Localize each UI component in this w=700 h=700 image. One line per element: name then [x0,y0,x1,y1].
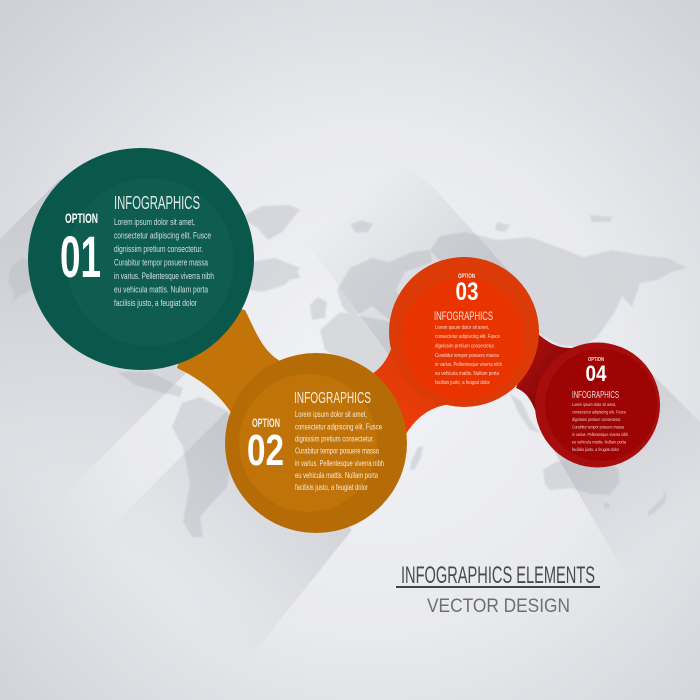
option 04 body text: facilisis justo, a feugiat dolor [572,447,619,452]
option 04 number: 04 [586,361,607,386]
option 03 body text: Curabitur tempor posuere massa [435,353,500,359]
option 02 body text: dignissim pretium consectetur. [295,434,374,444]
option 01 body text [114,217,214,308]
option 03 body text [435,325,502,386]
panel: option 01 [28,148,254,370]
connector: 03 to 04 [516,334,572,412]
connector: 02 to 03 [372,335,452,434]
option 03 body text: Lorem ipsum dolor sit amet, [435,325,489,331]
option 02 body text: consectetur adipiscing elit. Fusce [295,422,382,432]
option 04 body text: Curabitur tempor posuere massa [572,424,624,430]
panel: option 02 [225,353,407,533]
long shadows [0,165,700,700]
option 04 body text: eu vehicula mattis. Nullam porta [572,440,626,444]
connector: 01 to 02 [177,300,300,440]
option 01 body text: in varius. Pellentesque viverra nibh [114,271,214,281]
subtitle: vector design: VECTOR DESIGN [427,595,570,617]
option 02 number: 02 [247,426,284,475]
option 02 body text: eu vehicula mattis. Nullam porta [295,471,378,480]
panel: option 03 [389,257,539,407]
option 04 heading: INFOGRAPHICS [572,390,619,401]
option 02 body text: Curabitur tempor posuere massa [295,446,379,456]
option 03 body text: dignissim pretium consectetur. [435,344,495,350]
option 03 body text: in varius. Pellentesque viverra nibh [435,362,502,368]
option 04 body text: in varius. Pellentesque viverra nibh [572,432,628,437]
option 02 body text: facilisis justo, a feugiat dolor [295,483,368,492]
option 04 label: OPTION [588,357,604,363]
option 03 number: 03 [456,278,478,306]
option 03 label: OPTION [458,273,475,280]
option 01 body text: eu vehicula mattis. Nullam porta [114,284,208,294]
option 01 label: OPTION [65,210,98,226]
option 01 body text: Curabitur tempor posuere massa [114,258,208,268]
option 03 body text: facilisis justo, a feugiat dolor [435,380,490,386]
option 03 heading: INFOGRAPHICS [434,309,493,323]
option 03 body text: consectetur adipiscing elit. Fusce [435,334,500,340]
option 02 body text: Lorem ipsum dolor sit amet, [295,410,367,419]
option 01 number: 01 [60,225,101,290]
option 04 body text: dignissim pretium consectetur. [572,417,621,422]
option 04 body text: consectetur adipiscing elit. Fusce [572,410,626,414]
option 02 heading: INFOGRAPHICS [294,390,371,407]
panel: option 04 [535,342,660,468]
option 04 body text: Lorem ipsum dolor sit amet, [572,402,616,407]
option 01 heading: INFOGRAPHICS [114,193,200,213]
option 02 label: OPTION [252,416,280,430]
option 01 body text: facilisis justo, a feugiat dolor [114,298,197,308]
option 01 body text: Lorem ipsum dolor sit amet, [114,217,195,227]
option 02 body text [295,410,384,492]
option 03 body text: eu vehicula mattis. Nullam porta [435,371,500,377]
option 01 body text: dignissim pretium consectetur. [114,244,203,254]
option 01 body text: consectetur adipiscing elit. Fusce [114,230,211,240]
world map [8,205,687,537]
option 04 body text [572,402,628,452]
option 02 body text: in varius. Pellentesque viverra nibh [295,459,384,468]
